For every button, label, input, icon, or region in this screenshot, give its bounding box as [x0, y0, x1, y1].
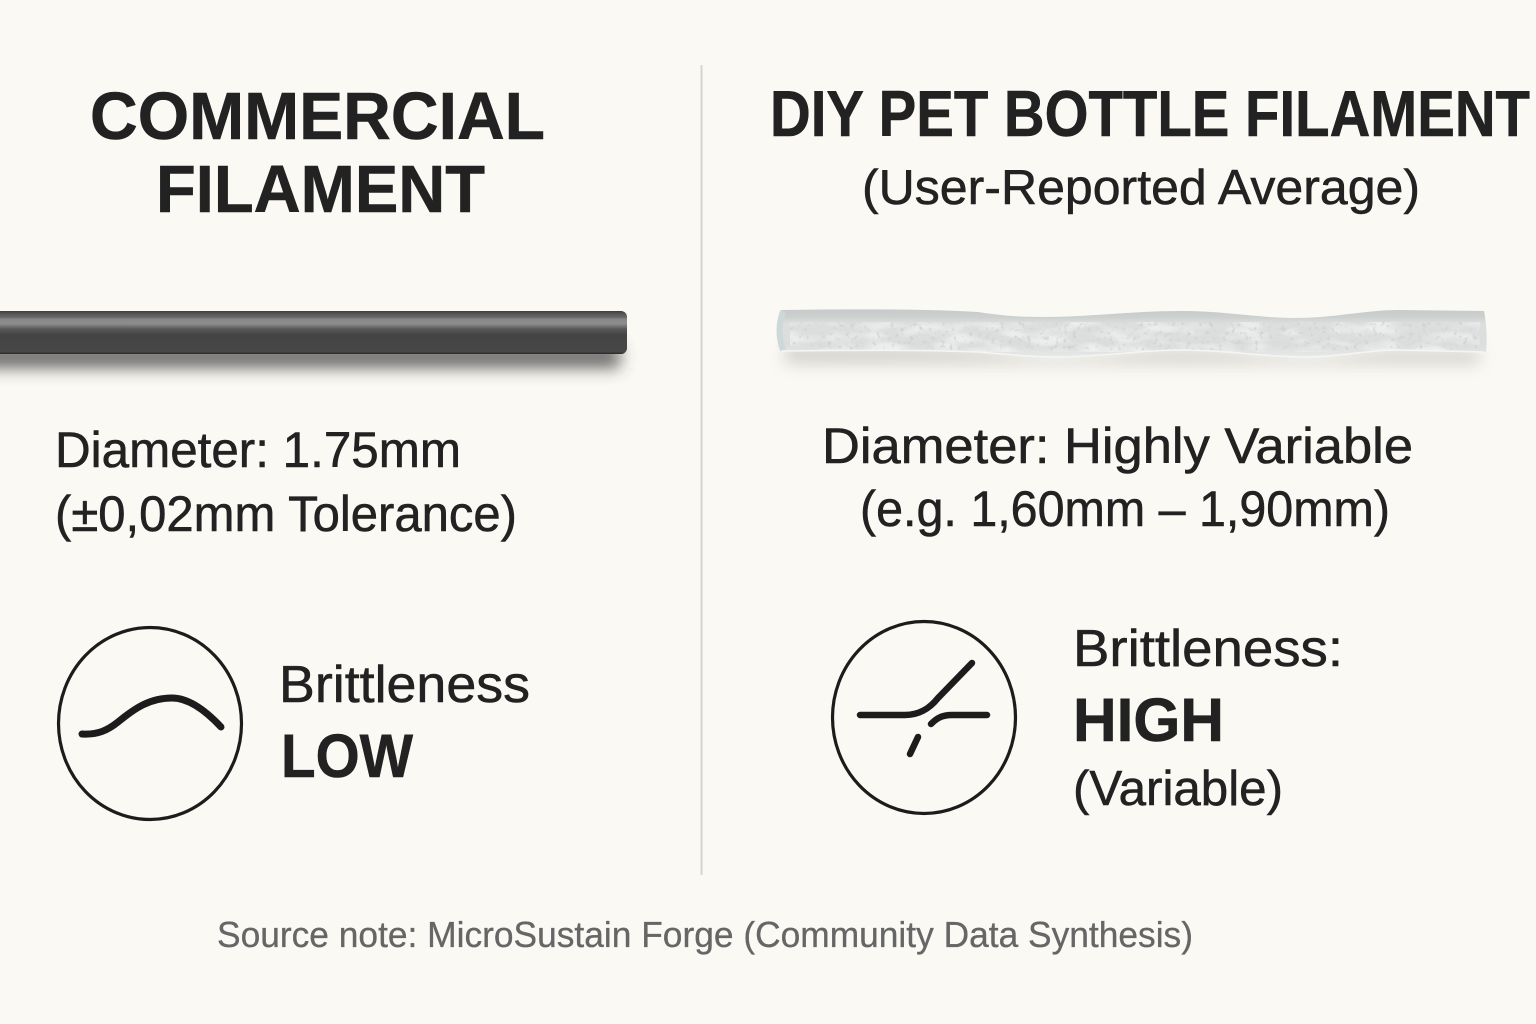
text: brittleness high: HIGH — [1073, 686, 1224, 754]
text: diameter variability: Diameter: Highly Variable — [822, 418, 1413, 474]
center divider — [700, 65, 702, 875]
image: wavy translucent DIY filament — [778, 309, 1487, 364]
text: diameter variability: (e.g. 1,60mm – 1,90mm) — [860, 481, 1390, 537]
text: brittleness high — [1073, 620, 1343, 816]
heading: commercial filament: FILAMENT — [156, 152, 485, 227]
text: diameter specification — [55, 422, 517, 542]
heading: commercial filament — [90, 79, 545, 227]
panel: commercial filament — [0, 79, 627, 820]
source note: Source note: MicroSustain Forge (Community Data Synthesis) — [217, 914, 1193, 955]
text: diameter specification: (±0,02mm Tolerance) — [55, 486, 517, 542]
image: black commercial filament rod — [0, 311, 627, 368]
heading: DIY PET bottle filament: (User-Reported Average) — [862, 161, 1420, 215]
text: brittleness high: Brittleness: — [1073, 620, 1343, 678]
heading: commercial filament: COMMERCIAL — [90, 79, 545, 154]
text: diameter variability — [822, 418, 1413, 537]
text: brittleness low — [279, 656, 530, 790]
panel: DIY PET bottle filament — [770, 77, 1530, 816]
text: diameter specification: Diameter: 1.75mm — [55, 422, 461, 478]
icon: fractured filament in circle — [832, 622, 1016, 814]
text: brittleness high: (Variable) — [1073, 762, 1283, 816]
text: brittleness low: LOW — [281, 722, 413, 790]
text: brittleness low: Brittleness — [279, 656, 530, 714]
heading: DIY PET bottle filament — [770, 77, 1530, 215]
icon: smooth bend in circle — [58, 628, 242, 820]
